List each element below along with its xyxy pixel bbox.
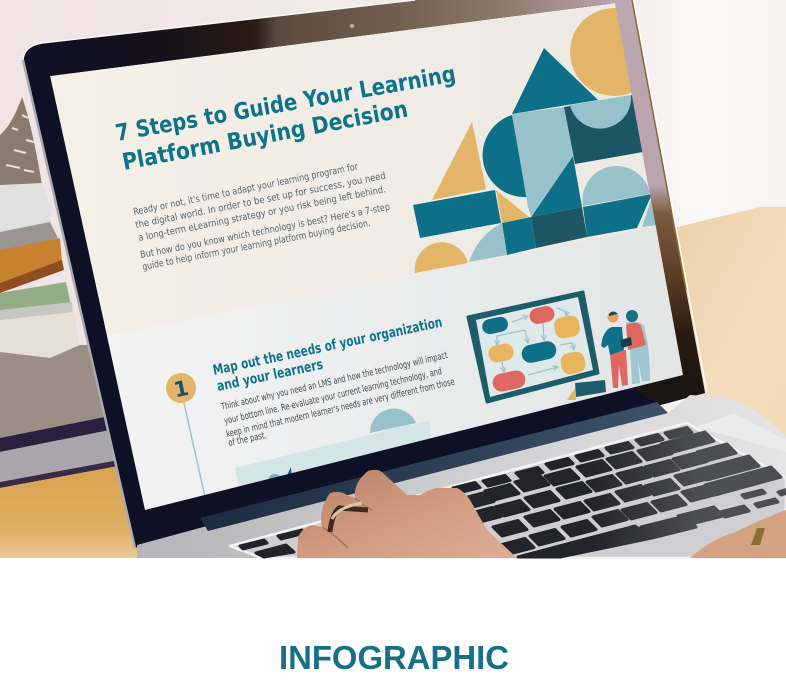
step body text: of the past. [227,430,268,449]
light teal lower panel with semicircle [235,409,430,490]
photo: stacked books and objects on the left [0,97,150,558]
step body text: your bottom line. Re-evaluate your current learning technology, and [223,366,443,427]
intro text [132,161,391,273]
title: Platform Buying Decision [120,97,410,176]
intro text: But how do you know which technology is best? Here's a 7-step [139,202,391,261]
ring [751,528,765,545]
intro text: a long-term eLearning strategy or you risk being left behind. [137,184,387,244]
intro text: the digital world. In order to be set up for success, you need [134,171,387,231]
step heading: and your learners [216,357,324,395]
title: 7 Steps to Guide Your Learning [114,61,458,147]
flowchart tablet illustration [468,292,598,402]
section 1 panel [107,226,690,515]
left hand on the keyboard [297,470,517,558]
camera dot [350,24,354,28]
step heading: Map out the needs of your organization [212,315,444,379]
right hand on the palm rest [690,510,786,558]
step body text: Think about why you need an LMS and how the technology will impact [220,350,449,413]
step body text: keep in mind that modern learner's needs are very different from those [225,377,456,440]
laptop base and palm rest [137,395,786,558]
step number badge [166,373,205,497]
caption: INFOGRAPHIC [279,639,509,676]
ring [330,503,368,532]
two people illustration [601,310,650,388]
keyboard [230,423,786,558]
cut-off page artwork at bottom edge [567,380,606,400]
intro text: Ready or not, it's time to adapt your learning program for [132,161,359,218]
laptop screen showing the infographic [50,3,690,515]
geometric shape artwork [413,8,658,273]
laptop lid and bezel [23,0,707,548]
hinge strip [200,402,668,531]
intro text: guide to help inform your learning platform buying decision. [141,218,371,273]
step heading [212,319,442,391]
step body text [220,350,456,449]
step number badge: 1 [172,376,191,402]
